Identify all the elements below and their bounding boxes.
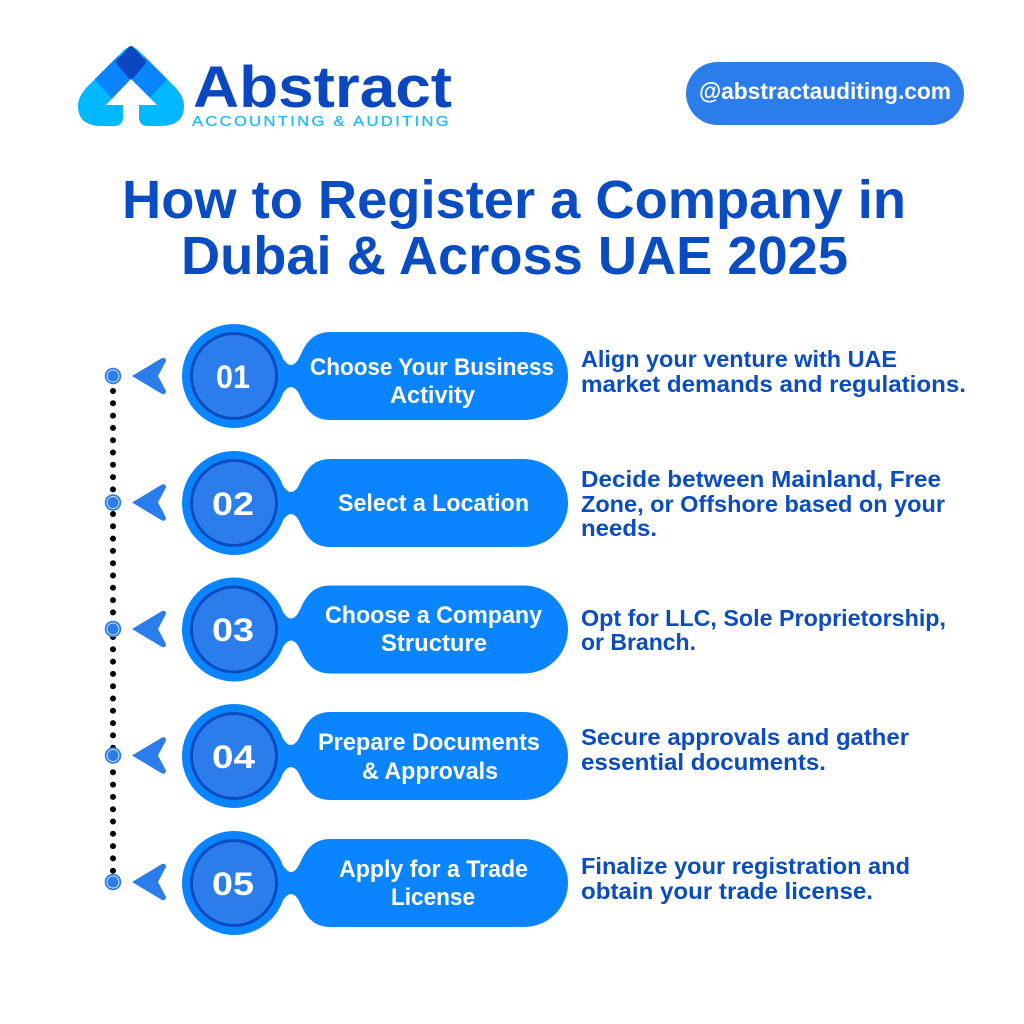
step title 2: Select a Location bbox=[338, 490, 529, 517]
step title 4: & Approvals bbox=[362, 758, 498, 785]
number badge 3 bbox=[182, 578, 286, 682]
timeline node 2 bbox=[105, 494, 121, 511]
arrow 4 bbox=[132, 737, 166, 774]
arrow 3 bbox=[132, 611, 166, 647]
title: How to Register a Company in bbox=[122, 170, 906, 230]
arrow 1 bbox=[132, 358, 166, 394]
number badge 1: 01 bbox=[216, 359, 250, 395]
number badge 3: 03 bbox=[212, 612, 254, 648]
description 3: Opt for LLC, Sole Proprietorship, bbox=[581, 605, 946, 631]
title bbox=[122, 170, 906, 286]
timeline node 1 bbox=[105, 368, 121, 384]
timeline node 3 bbox=[105, 621, 121, 637]
step title 4 bbox=[318, 729, 540, 785]
step 5 bbox=[105, 831, 910, 935]
description 1 bbox=[581, 346, 966, 397]
logo: Abstract Accounting & Auditing bbox=[78, 47, 452, 130]
pill 2 bbox=[270, 459, 568, 547]
arrow 2 bbox=[132, 484, 166, 521]
step title 5 bbox=[339, 856, 528, 911]
step title 3 bbox=[325, 602, 543, 657]
timeline node 4 bbox=[105, 747, 121, 764]
timeline: dotted line bbox=[110, 391, 116, 872]
arrow 5 bbox=[132, 864, 166, 900]
step 3 bbox=[105, 578, 946, 682]
description 5 bbox=[581, 853, 910, 904]
number badge 4 bbox=[182, 704, 286, 808]
number badge 1 bbox=[182, 324, 286, 428]
description 2: Decide between Mainland, Free bbox=[581, 466, 941, 492]
description 4: essential documents. bbox=[581, 749, 826, 775]
pill 1 bbox=[270, 332, 568, 420]
pill 5 bbox=[270, 839, 568, 927]
number badge 2 bbox=[182, 451, 286, 555]
pill 3 bbox=[270, 586, 568, 674]
description 4: Secure approvals and gather bbox=[581, 724, 909, 750]
step 1 bbox=[105, 324, 966, 428]
timeline node 5 bbox=[105, 874, 121, 890]
pill 4 bbox=[270, 712, 568, 800]
logo tagline: ACCOUNTING & AUDITING bbox=[192, 114, 451, 130]
description 2: Zone, or Offshore based on your bbox=[581, 491, 945, 517]
description 3 bbox=[581, 605, 946, 655]
website badge bbox=[686, 62, 964, 125]
step title 4: Prepare Documents bbox=[318, 729, 540, 756]
number badge 2: 02 bbox=[212, 486, 254, 522]
step title 1: Activity bbox=[390, 382, 476, 409]
step 4 bbox=[105, 704, 909, 808]
logo wordmark: Abstract bbox=[193, 55, 452, 120]
description 1: market demands and regulations. bbox=[581, 371, 966, 397]
number badge 4: 04 bbox=[212, 739, 255, 775]
description 5: Finalize your registration and bbox=[581, 853, 910, 879]
description 2: needs. bbox=[581, 515, 657, 541]
description 1: Align your venture with UAE bbox=[581, 346, 897, 372]
step title 5: License bbox=[391, 884, 475, 911]
step title 5: Apply for a Trade bbox=[339, 856, 528, 883]
title: Dubai & Across UAE 2025 bbox=[181, 226, 848, 286]
description 5: obtain your trade license. bbox=[581, 878, 873, 904]
number badge 5: 05 bbox=[212, 866, 254, 902]
step title 1 bbox=[310, 354, 554, 409]
description 2 bbox=[581, 466, 945, 541]
step 2 bbox=[105, 451, 945, 555]
step title 1: Choose Your Business bbox=[310, 354, 554, 381]
step title 3: Structure bbox=[381, 630, 487, 657]
description 3: or Branch. bbox=[581, 629, 696, 655]
description 4 bbox=[581, 724, 909, 775]
icon: house arrow bbox=[78, 47, 184, 127]
number badge 5 bbox=[182, 831, 286, 935]
step title 3: Choose a Company bbox=[325, 602, 543, 629]
website badge: @abstractauditing.com bbox=[699, 78, 951, 104]
